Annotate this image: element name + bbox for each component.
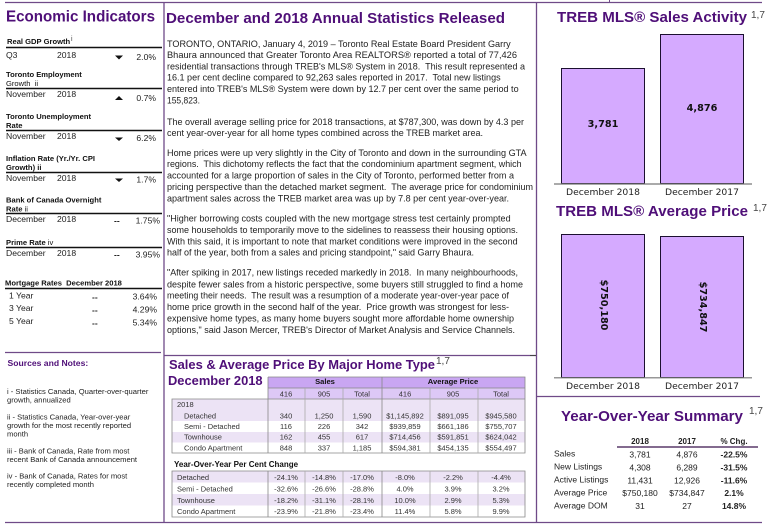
- table: summary: 14.8%: [722, 501, 746, 511]
- table: 2018 sales and prices: Condo Apartment: [184, 444, 243, 452]
- superscript: average price note: 1,7: [753, 203, 767, 214]
- table: year-over-year per cent change: -17.0%: [350, 473, 374, 482]
- indicator: real GDP growth: 2018: [57, 50, 76, 60]
- text block: paragraph 4: half of the year, both from a sales and pricing standpoint," said Garry Bhaura.: [167, 248, 474, 258]
- indicator: real GDP growth: [6, 36, 162, 62]
- table: summary: -22.5%: [721, 450, 748, 460]
- indicator: Bank of Canada overnight rate: --: [114, 216, 120, 226]
- indicator: Toronto unemployment rate: Toronto Unemployment: [6, 112, 92, 121]
- table: 2018 sales and prices: $945,580: [485, 412, 517, 420]
- bar chart: sales activity: 4,876: [687, 103, 718, 114]
- indicator: Toronto unemployment rate: November: [6, 131, 46, 141]
- table: 2018 sales and prices: 848: [280, 444, 292, 452]
- text block: paragraph 4: "Higher borrowing costs coupled with the new mortgage stress test certainly prompted: [167, 214, 511, 224]
- table: year-over-year per cent change: -2.2%: [443, 473, 463, 482]
- table: 2018 sales and prices: Total: [354, 390, 370, 398]
- note text: [7, 387, 149, 489]
- table: 2018 sales and prices: 905: [318, 390, 330, 398]
- text block: paragraph 5: options," said Jason Mercer, TREB's Director of Market Analysis and Service Channels.: [167, 325, 515, 335]
- table: 2018 sales and prices: $939,859: [389, 422, 421, 431]
- text block: paragraph 3: [167, 148, 533, 204]
- table: year-over-year per cent change: -32.6%: [274, 484, 298, 494]
- table: 2018 sales and prices: Semi - Detached: [184, 422, 240, 431]
- text block: paragraph 1: Bhaura announced that Greater Toronto Area REALTORS® reported a total of 77,426: [167, 50, 517, 60]
- indicator: Toronto unemployment rate: Rate: [6, 121, 22, 130]
- heading: December 2018: December 2018: [168, 373, 263, 388]
- text block: paragraph 1: residential transactions through TREB's MLS® System in 2018. This result represented a: [167, 62, 526, 72]
- table: 2018 sales and prices: 617: [356, 432, 368, 442]
- table: year-over-year per cent change: Townhouse: [177, 496, 215, 505]
- heading: press release title: December and 2018 Annual Statistics Released: [166, 10, 505, 27]
- table: year-over-year per cent change: -24.1%: [274, 473, 298, 482]
- table: year-over-year per cent change: -4.4%: [491, 473, 511, 482]
- panel: TREB MLS sales activity: [554, 9, 765, 198]
- bar chart: sales activity: 3,781: [588, 119, 619, 130]
- bar chart: sales activity: December 2017: [665, 187, 739, 198]
- panel: sales and average price by major home type: [168, 356, 525, 517]
- indicator: Bank of Canada overnight rate: Rate ii: [6, 204, 28, 214]
- panel: press release: [166, 10, 533, 335]
- table: 2018 sales and prices: 416: [399, 390, 411, 398]
- indicator: Toronto unemployment rate: [6, 112, 162, 143]
- table: year-over-year per cent change: Semi - Detached: [177, 484, 233, 494]
- table: 2018 sales and prices: 116: [280, 422, 292, 431]
- text block: paragraph 4: [167, 214, 518, 258]
- table: year-over-year per cent change: 10.0%: [394, 496, 416, 505]
- table: mortgage rates: --: [92, 292, 98, 302]
- indicator: Toronto employment growth: Growth ii: [6, 79, 38, 88]
- table: year-over-year per cent change: -28.8%: [350, 484, 374, 494]
- text block: paragraph 2: The overall average selling price for 2018 transactions, at $787,300, was down by 4.3 per: [167, 117, 524, 127]
- text block: paragraph 1: 155,823.: [167, 96, 200, 106]
- table: summary: -11.6%: [721, 476, 748, 486]
- bar chart: sales activity: December 2018: [566, 187, 640, 198]
- table: year-over-year per cent change: -14.8%: [312, 473, 336, 482]
- table: summary: Active Listings: [554, 474, 608, 484]
- table: 2018 sales and prices: 1,590: [353, 412, 371, 420]
- table: mortgage rates: [5, 278, 162, 328]
- table: mortgage rates: Mortgage Rates December 2018: [5, 278, 122, 288]
- heading: year-over-year summary: Year-Over-Year Summary: [561, 408, 744, 425]
- indicator: inflation rate: Inflation Rate (Yr./Yr. CPI: [6, 154, 95, 163]
- heading: year-over-year per cent change: Year-Over-Year Per Cent Change: [174, 460, 299, 469]
- panel: sources and notes: [7, 358, 149, 489]
- note text: iv - Bank of Canada, Rates for most: [7, 472, 128, 480]
- table: 2018 sales and prices: Townhouse: [184, 432, 222, 442]
- indicator: inflation rate: November: [6, 173, 46, 183]
- table: year-over-year per cent change: -21.8%: [312, 507, 336, 516]
- indicator: prime rate: December: [6, 248, 46, 258]
- indicator: real GDP growth: 2.0%: [136, 52, 156, 62]
- note text: ii - Statistics Canada, Year-over-year: [7, 412, 131, 422]
- text block: paragraph 5: "After spiking in 2017, new listings receded markedly in 2018. In many neighbourhoods,: [167, 268, 518, 278]
- table: year-over-year per cent change: -8.0%: [395, 473, 415, 482]
- bar chart: average price: $750,180: [598, 280, 609, 331]
- indicator: inflation rate: 2018: [57, 173, 76, 183]
- table: 2018 sales and prices: $554,497: [485, 444, 517, 452]
- bar chart: average price: [554, 234, 752, 392]
- indicator: Toronto unemployment rate: 2018: [57, 131, 76, 141]
- table: year-over-year per cent change: Condo Apartment: [177, 507, 236, 516]
- table: 2018 sales and prices: $591,851: [437, 432, 469, 442]
- table: year-over-year per cent change: -26.6%: [312, 484, 336, 494]
- bar chart: sales activity: [554, 34, 752, 198]
- table: summary: 11,431: [627, 476, 653, 486]
- indicator: Toronto unemployment rate: 6.2%: [136, 133, 156, 143]
- table: summary: 2018: [631, 437, 649, 446]
- bar chart: average price: December 2017: [665, 381, 739, 392]
- table: mortgage rates: --: [92, 305, 98, 315]
- text block: paragraph 3: Home prices were up very slightly in the City of Toronto and down in the surrounding GTA: [167, 148, 527, 158]
- indicator: prime rate: 2018: [57, 248, 76, 258]
- indicator: inflation rate: Growth) ii: [6, 163, 41, 172]
- table: 2018 sales and prices: Total: [493, 390, 509, 398]
- table: year-over-year per cent change: -23.9%: [274, 507, 298, 516]
- table: summary: 2.1%: [724, 488, 744, 498]
- table: 2018 sales and prices: 455: [318, 432, 330, 442]
- table: summary: [554, 437, 758, 511]
- table: 2018 sales and prices: 905: [447, 390, 459, 398]
- table: 2018 sales and prices: [172, 377, 525, 453]
- table: mortgage rates: 3.64%: [133, 292, 157, 302]
- indicator: prime rate: 3.95%: [136, 250, 160, 260]
- indicator: prime rate: Prime Rate iv: [6, 238, 53, 247]
- note text: month: [7, 430, 28, 438]
- text block: paragraph 3: regions. This dichotomy reflects the fact that the condominium apartment segment, which: [167, 159, 522, 169]
- panel: TREB MLS average price: [554, 203, 767, 392]
- table: summary: 31: [635, 501, 645, 511]
- table: summary: -31.5%: [721, 462, 748, 472]
- superscript: sales activity note: 1,7: [751, 10, 765, 21]
- panel: economic indicators: [5, 8, 162, 328]
- bar chart: average price: $734,847: [697, 282, 708, 332]
- note text: growth for the most recently reported: [7, 421, 131, 430]
- indicator: Toronto employment growth: Toronto Employment: [6, 70, 82, 79]
- table: summary: $734,847: [669, 488, 705, 498]
- superscript: table note: 1,7: [436, 356, 450, 367]
- table: 2018 sales and prices: $594,381: [389, 444, 421, 452]
- text block: paragraph 4: With this said, it is important to note that market conditions were improved in the second: [167, 236, 518, 246]
- table: 2018 sales and prices: 162: [280, 432, 292, 442]
- table: summary: 12,926: [674, 476, 700, 486]
- heading: economic indicators: Economic Indicators: [6, 8, 155, 26]
- heading: average price: TREB MLS® Average Price: [556, 203, 748, 220]
- indicator: prime rate: [6, 238, 162, 260]
- table: summary: Average Price: [554, 488, 608, 498]
- table: year-over-year per cent change: Detached: [177, 473, 209, 482]
- superscript: summary note: 1,7: [749, 406, 763, 417]
- table: 2018 sales and prices: $1,145,892: [386, 412, 424, 420]
- table: mortgage rates: 1 Year: [9, 290, 34, 300]
- table: summary: New Listings: [554, 462, 602, 472]
- text block: paragraph 1: TORONTO, ONTARIO, January 4, 2019 – Toronto Real Estate Board President Garry: [167, 39, 511, 49]
- heading: sales and average price: Sales & Average Price By Major Home Type: [169, 357, 435, 372]
- table: year-over-year per cent change: -23.4%: [350, 507, 374, 516]
- text block: paragraph 1: entered into TREB's MLS® System were down by 12.7 per cent over the same period to: [167, 84, 519, 94]
- indicator: Toronto employment growth: 2018: [57, 89, 76, 99]
- note text: growth, annualized: [7, 396, 71, 404]
- table: 2018 sales and prices: $624,042: [485, 432, 517, 442]
- indicator: real GDP growth: Real GDP Growth: [7, 37, 71, 46]
- table: 2018 sales and prices: $891,095: [437, 412, 469, 420]
- table: year-over-year per cent change: 5.8%: [444, 507, 462, 516]
- indicator: Toronto employment growth: 0.7%: [136, 93, 156, 103]
- table: 2018 sales and prices: $755,707: [485, 422, 517, 431]
- table: 2018 sales and prices: 2018: [177, 400, 194, 409]
- heading: sales activity: TREB MLS® Sales Activity: [557, 9, 748, 26]
- table: summary: $750,180: [622, 488, 658, 498]
- table: summary: 3,781: [629, 450, 651, 460]
- text block: paragraph 5: home price growth in the second half of the year. Price growth was strongest for less-: [167, 302, 509, 312]
- table: 2018 sales and prices: $661,186: [437, 422, 469, 431]
- note text: recently completed month: [7, 480, 94, 489]
- table: year-over-year per cent change: -28.1%: [350, 496, 374, 505]
- table: mortgage rates: 3 Year: [9, 303, 34, 313]
- table: year-over-year per cent change: 5.3%: [492, 496, 510, 505]
- indicator: real GDP growth: i: [71, 36, 73, 43]
- indicator: Bank of Canada overnight rate: [6, 196, 162, 226]
- indicator: inflation rate: 1.7%: [136, 174, 156, 184]
- table: mortgage rates: 5.34%: [133, 318, 157, 328]
- indicator: inflation rate: [6, 154, 162, 184]
- indicator: Bank of Canada overnight rate: December: [6, 214, 46, 224]
- table: summary: 6,289: [676, 462, 698, 472]
- indicator: Bank of Canada overnight rate: 2018: [57, 214, 76, 224]
- table: 2018 sales and prices: Average Price: [428, 377, 478, 386]
- text block: paragraph 3: apartment sales across the TREB market area was up by 7.8 per cent year-over-year.: [167, 194, 509, 204]
- table: 2018 sales and prices: 1,185: [353, 444, 371, 452]
- text block: paragraph 1: [167, 39, 526, 106]
- table: summary: 27: [682, 501, 692, 511]
- text block: paragraph 4: some households to temporarily move to the sidelines to reassess their housing options.: [167, 225, 518, 235]
- table: 2018 sales and prices: 337: [318, 444, 330, 452]
- text block: paragraph 3: pricing perspective than the detached market segment. The average price for condominium: [167, 182, 533, 192]
- note text: recent Bank of Canada announcement: [7, 455, 138, 464]
- table: year-over-year per cent change: 9.9%: [492, 507, 510, 516]
- panel: year-over-year summary: [554, 406, 763, 511]
- table: year-over-year per cent change: -31.1%: [312, 496, 336, 505]
- table: 2018 sales and prices: 226: [318, 422, 330, 431]
- table: year-over-year per cent change: [172, 471, 525, 517]
- text block: paragraph 5: [167, 268, 523, 335]
- text block: paragraph 1: 16.1 per cent decline compared to 92,263 sales reported in 2017. Total new listings: [167, 72, 501, 82]
- indicator: prime rate: --: [114, 250, 120, 260]
- table: year-over-year per cent change: 4.0%: [396, 484, 414, 494]
- table: mortgage rates: --: [92, 318, 98, 328]
- note text: iii - Bank of Canada, Rate from most: [7, 446, 130, 456]
- table: summary: 2017: [678, 437, 696, 446]
- table: year-over-year per cent change: -18.2%: [274, 496, 298, 505]
- text block: paragraph 3: accounted for a large proportion of sales in the City of Toronto, performed better from a: [167, 170, 515, 180]
- indicator: Bank of Canada overnight rate: 1.75%: [136, 216, 160, 226]
- table: summary: 4,876: [676, 450, 698, 460]
- table: year-over-year per cent change: 3.9%: [444, 484, 462, 494]
- table: year-over-year per cent change: 11.4%: [395, 507, 416, 516]
- table: 2018 sales and prices: 340: [280, 412, 292, 420]
- table: summary: Average DOM: [554, 500, 608, 510]
- note text: i - Statistics Canada, Quarter-over-quarter: [7, 387, 149, 396]
- heading: sources and notes: Sources and Notes:: [8, 358, 88, 368]
- table: mortgage rates: 5 Year: [9, 316, 34, 326]
- text block: paragraph 5: meeting their needs. The result was a resumption of a moderate year-over-year pace of: [167, 290, 509, 300]
- indicator: Bank of Canada overnight rate: Bank of Canada Overnight: [6, 196, 102, 204]
- table: year-over-year per cent change: 3.2%: [492, 484, 510, 494]
- table: summary: Sales: [554, 448, 575, 458]
- table: summary: 4,308: [629, 462, 651, 472]
- table: 2018 sales and prices: 1,250: [315, 412, 333, 420]
- text block: paragraph 5: expensive home types, as many home buyers sought more affordable home ownership: [167, 314, 514, 324]
- bar chart: average price: December 2018: [566, 381, 640, 392]
- text block: paragraph 5: despite fewer sales from a historic perspective, some buyers still struggled to find a home: [167, 280, 523, 290]
- table: 2018 sales and prices: 342: [356, 422, 368, 431]
- table: year-over-year per cent change: 2.9%: [444, 496, 462, 505]
- table: 2018 sales and prices: $714,456: [389, 432, 421, 442]
- table: mortgage rates: 4.29%: [133, 304, 157, 314]
- table: 2018 sales and prices: 416: [280, 390, 292, 398]
- indicator: real GDP growth: Q3: [6, 50, 18, 60]
- table: 2018 sales and prices: Sales: [315, 377, 335, 386]
- indicator: Toronto employment growth: [6, 70, 162, 103]
- table: 2018 sales and prices: Detached: [184, 412, 216, 420]
- table: summary: % Chg.: [720, 437, 748, 446]
- text block: paragraph 2: cent year-over-year for all home types combined across the TREB market area.: [167, 128, 483, 138]
- table: 2018 sales and prices: $454,135: [437, 444, 469, 452]
- text block: paragraph 2: [167, 117, 524, 138]
- indicator: Toronto employment growth: November: [6, 89, 46, 99]
